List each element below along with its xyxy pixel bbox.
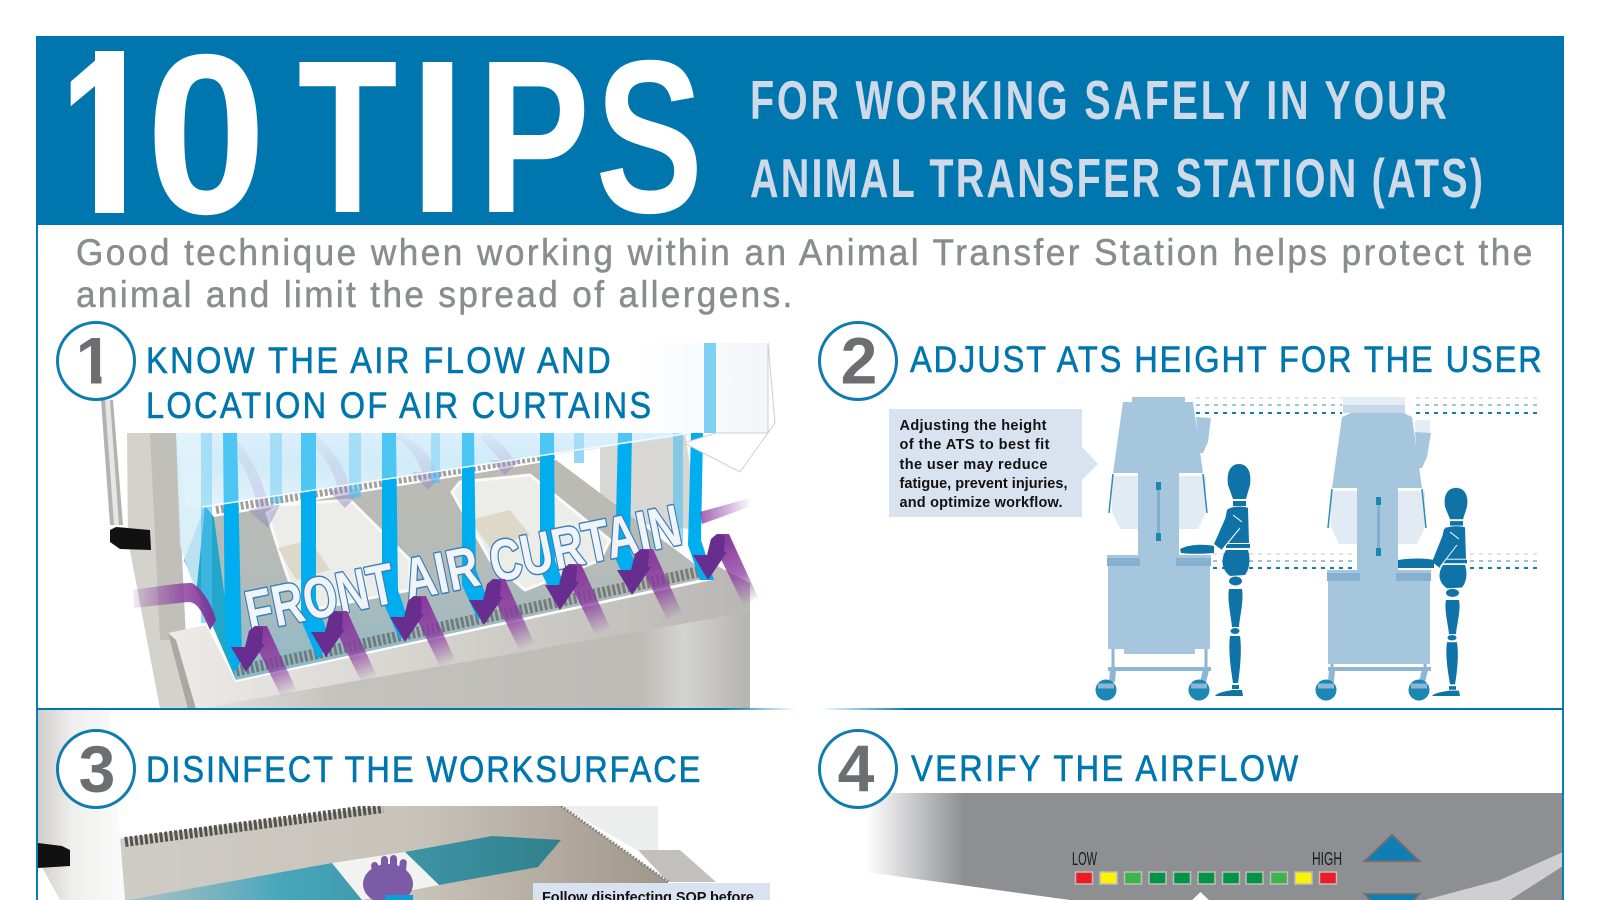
purple air arrows [133,498,761,698]
teal wipe direction arrow [128,836,561,900]
subtitle: ANIMAL TRANSFER STATION (ATS) [750,149,1483,210]
gray control panel [866,793,1563,900]
tip 3 number badge [58,730,134,808]
top height guide lines [1196,398,1540,413]
main title: 10 TIPS [59,7,703,262]
bar passing through header band [704,343,716,433]
callout: adjusting height: and optimize workflow. [900,495,1062,511]
black latch [38,843,70,868]
light rear air bars [201,433,683,623]
tip 1 number badge [58,322,134,400]
main title: 10 TIPS: 0 [146,8,266,262]
intro text: animal and limit the spread of allergens. [76,273,792,315]
main title: 10 TIPS: P [478,16,590,259]
air curtain label: FRONT AIR CURTAIN [240,493,687,645]
pointer [1188,892,1213,900]
intro text: Good technique when working within an Animal Transfer Station helps protect the [76,231,1532,273]
ATS unit raised [1316,397,1431,700]
callout: adjusting height: of the ATS to best fit [900,437,1050,453]
white header band over hood [115,343,770,433]
hood pole [101,400,123,525]
tip 4 heading: VERIFY THE AIRFLOW [911,748,1298,789]
tip 2 number badge: 2 [841,324,877,398]
main title: 10 TIPS: S [596,14,703,259]
mannequin user at lowered unit [1180,464,1250,696]
tip 1 heading: KNOW THE AIR FLOW AND [146,340,611,381]
work surface [214,460,712,680]
panel: tip 2 ATS height [889,397,1540,700]
sash side glass [684,343,775,472]
storage containers [267,475,610,612]
intro text [76,231,1532,315]
panel: tip 4 airflow display [866,793,1563,900]
gloved hand [363,855,413,900]
sash and side post [561,806,658,852]
panel frame borders [36,225,1564,900]
callout: adjusting height: Adjusting the height [900,418,1047,434]
tip 4 number badge: 4 [838,731,875,805]
tip 1 heading [146,340,651,426]
main title: 10 TIPS: T [298,15,397,258]
lower height guide lines [1213,554,1540,568]
rear grille [125,808,383,842]
subtitle [750,71,1483,210]
panel: tip 3 disinfect illustration [38,710,780,900]
numeral 1 stem [95,51,124,212]
side ledge [638,850,716,882]
tip 4 number badge [820,730,896,808]
callout: adjusting height: fatigue, prevent injuries, [900,476,1068,492]
callout: adjusting height: the user may reduce [900,457,1048,473]
callout: adjusting height [889,409,1098,517]
high label: HIGH [1312,849,1342,869]
rear wall and work surface [115,806,668,900]
tip 2 number badge [820,322,896,400]
tip 1 number badge: 1 [76,324,112,398]
translucent curtain tint [176,433,690,508]
left swoosh [866,872,1070,900]
ATS unit lowered [1096,397,1211,700]
tip 3 number badge: 3 [79,732,115,806]
callout: disinfecting SOP [533,883,770,900]
main title: 10 TIPS: 1 [59,7,154,262]
blue cuff [385,895,413,900]
left support column [127,433,192,709]
panel: tip 1 air curtains illustration [101,343,775,709]
mannequin user at raised unit [1398,488,1467,696]
perforated grilles [216,454,707,671]
right support [600,433,700,530]
down arrow button [1365,894,1419,900]
white sash strip above grille [110,806,383,840]
white header band [110,710,780,806]
airflow indicator lights [1076,872,1336,884]
right swoosh [1425,852,1563,900]
tip 1 heading: LOCATION OF AIR CURTAINS [146,385,651,426]
cabinet front below the work surface [194,600,750,709]
sash glass overlay lightening bars [176,433,690,508]
container contents [278,510,530,580]
main title: 10 TIPS: I [409,14,466,258]
sash lower edge [202,433,690,507]
side grille [561,806,668,882]
numeral 1 foot removal [60,186,154,216]
steel ledge [168,560,750,709]
low label: LOW [1072,849,1097,869]
left front post [38,710,125,900]
subtitle: FOR WORKING SAFELY IN YOUR [750,71,1447,132]
tip 3 heading: DISINFECT THE WORKSURFACE [146,749,700,790]
bright air curtain bars [223,433,714,672]
title banner [36,7,1564,262]
up arrow button [1365,835,1419,861]
black latch [110,527,151,550]
rear air swirl arrows [225,433,522,528]
tip 2 heading: ADJUST ATS HEIGHT FOR THE USER [910,339,1542,380]
